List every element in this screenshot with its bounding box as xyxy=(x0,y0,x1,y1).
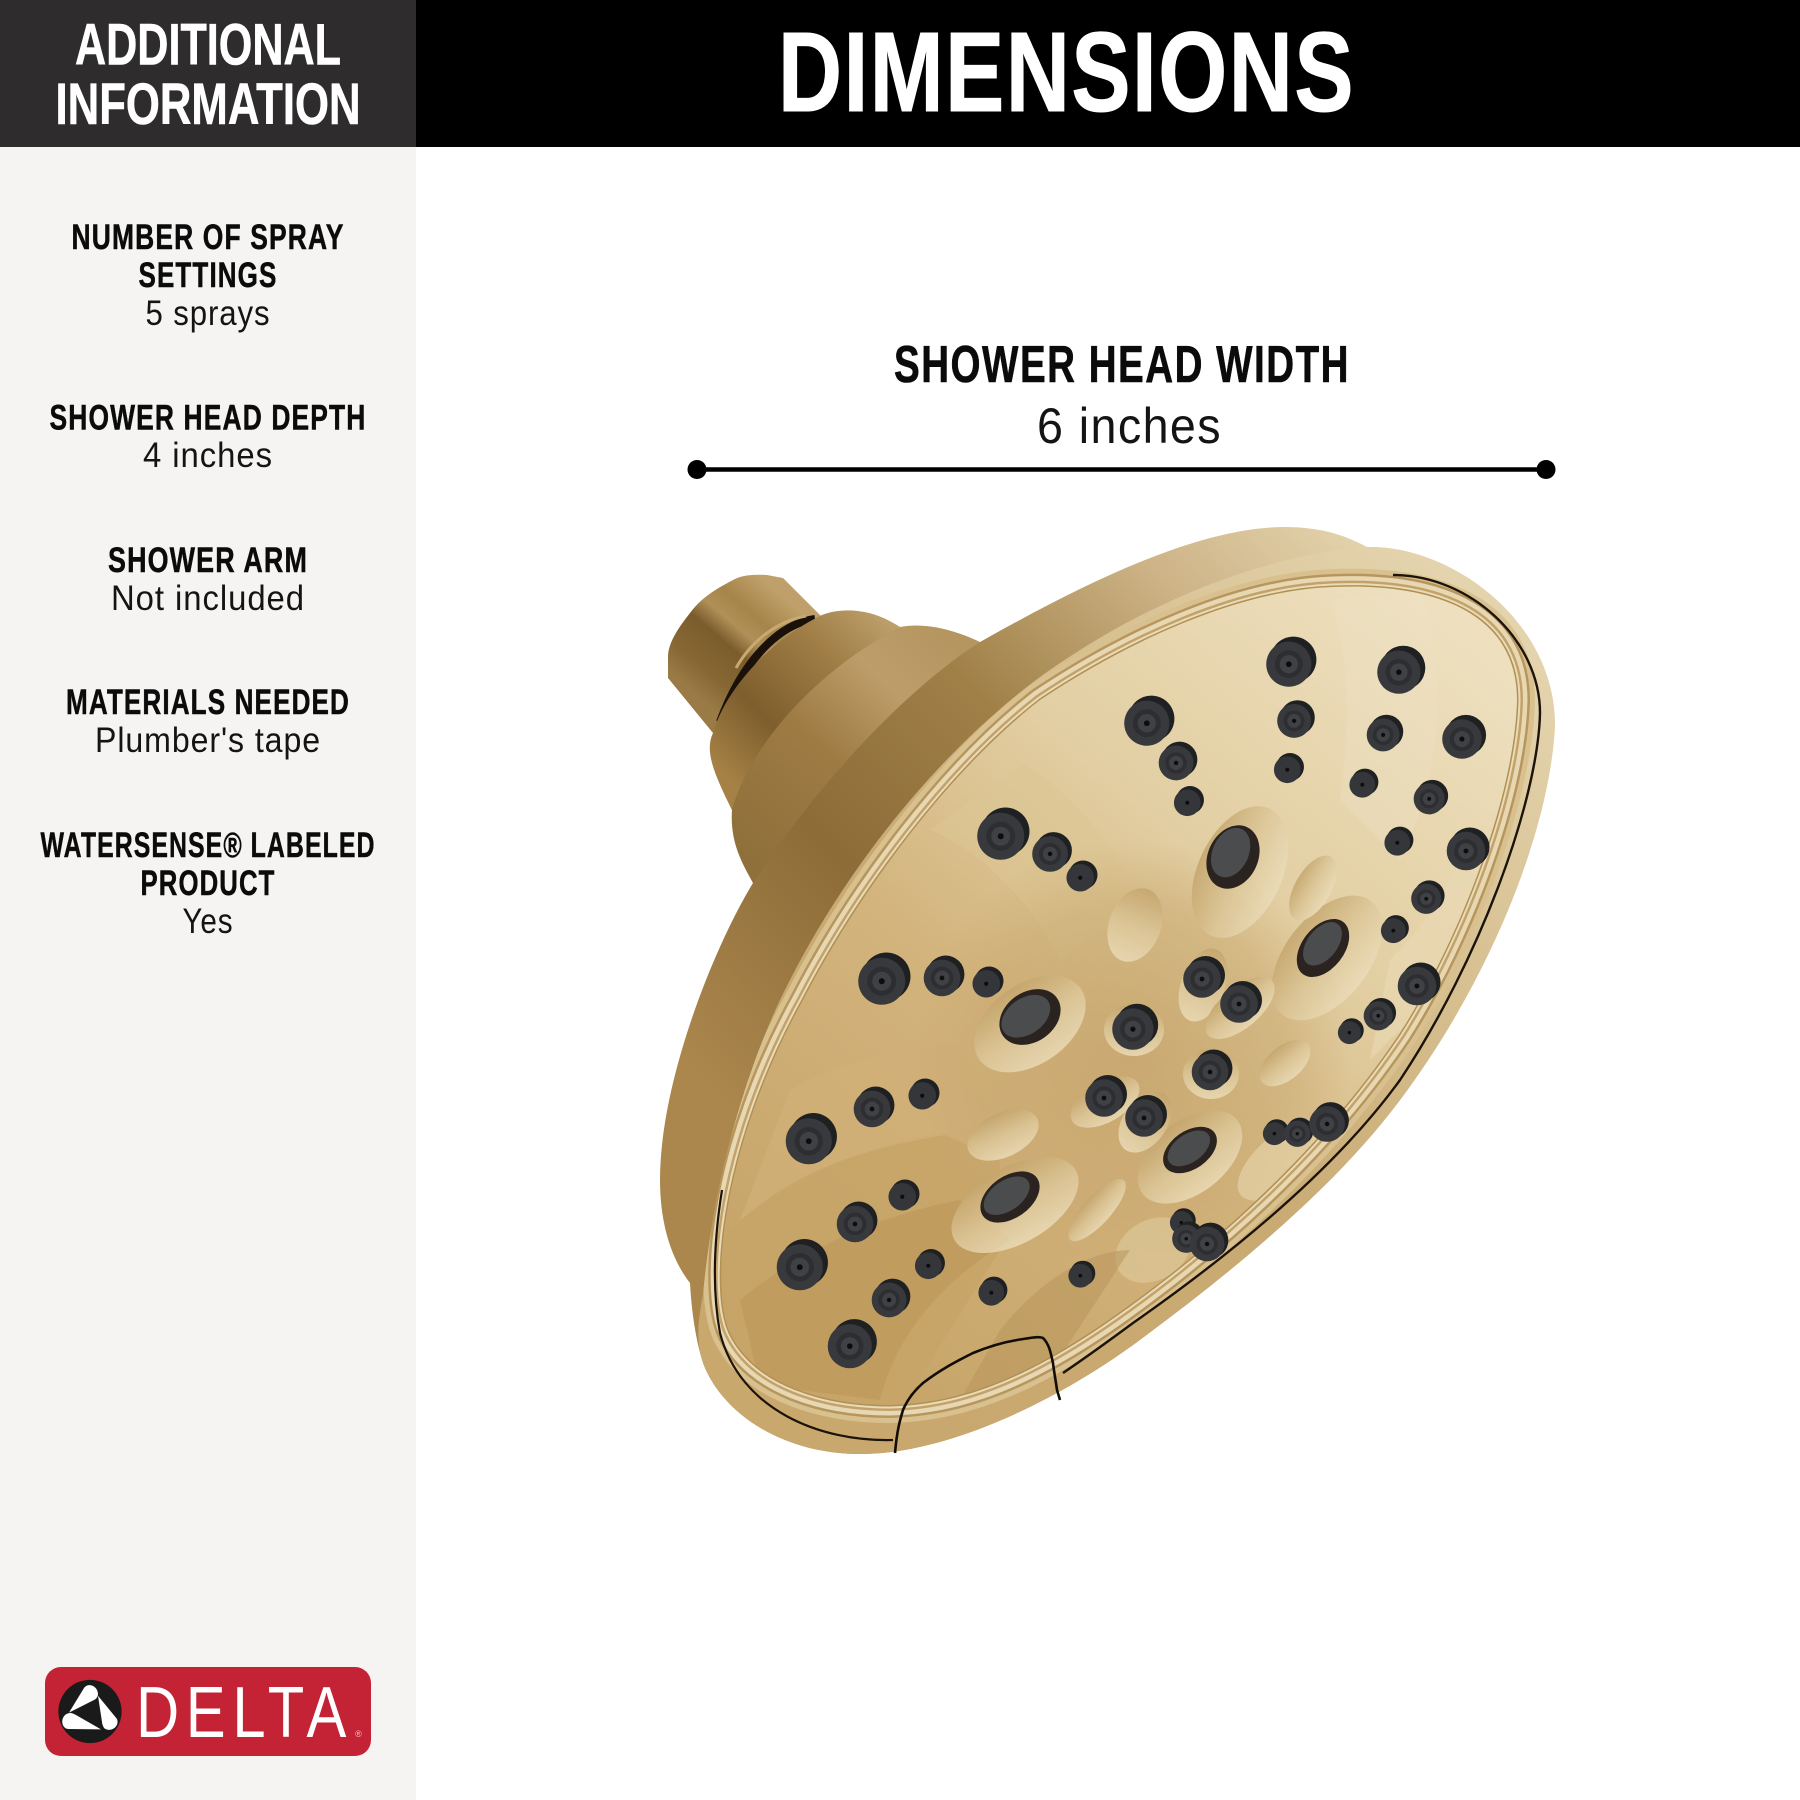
spec: watersense labeled product: Yes xyxy=(182,902,234,941)
spec: watersense labeled product xyxy=(40,825,376,941)
logo: delta: ® xyxy=(355,1729,362,1739)
spec: shower arm: SHOWER ARM xyxy=(108,540,308,580)
spec: shower arm: Not included xyxy=(111,579,305,618)
spec: materials needed xyxy=(66,682,350,760)
head shell xyxy=(660,527,1555,1454)
spray plate xyxy=(721,587,1517,1405)
header: additional information: ADDITIONAL xyxy=(75,12,341,77)
spec: number of spray settings: 5 sprays xyxy=(146,294,270,333)
spec: shower head depth xyxy=(50,398,366,475)
rim lip xyxy=(698,547,1555,1454)
header: additional information: INFORMATION xyxy=(56,72,360,137)
illustration: shower head xyxy=(660,527,1555,1454)
seam line upper right xyxy=(1063,575,1540,1373)
panel: additional information sidebar xyxy=(0,147,416,1800)
lower collar xyxy=(732,625,1000,900)
spec: shower head depth: SHOWER HEAD DEPTH xyxy=(50,398,366,438)
plate dimples xyxy=(935,791,1404,1273)
dimension label: shower head width: SHOWER HEAD WIDTH xyxy=(894,336,1350,394)
connector nut xyxy=(668,575,830,733)
spec: shower arm xyxy=(108,540,308,618)
header: additional information xyxy=(0,0,416,147)
dimension label: shower head width: 6 inches xyxy=(1037,398,1222,454)
rim grooves xyxy=(721,587,1517,1405)
spec: number of spray settings: NUMBER OF SPRAY xyxy=(72,217,344,257)
upper collar xyxy=(710,610,950,860)
spec: materials needed: Plumber's tape xyxy=(95,721,321,760)
spec: watersense labeled product: WATERSENSE® LABELED xyxy=(40,825,376,865)
dimension label: shower head width xyxy=(894,336,1350,454)
spec: shower head depth: 4 inches xyxy=(143,436,273,475)
spec: number of spray settings xyxy=(72,217,344,333)
spec: number of spray settings: SETTINGS xyxy=(138,255,278,295)
seam line lower left xyxy=(715,1190,893,1440)
spec: watersense labeled product: PRODUCT xyxy=(140,863,276,903)
dimension line: width arrow xyxy=(688,460,1556,479)
spec: materials needed: MATERIALS NEEDED xyxy=(66,682,350,722)
header: dimensions title: DIMENSIONS xyxy=(778,9,1355,135)
spray nozzles xyxy=(777,637,1490,1368)
logo: delta xyxy=(45,1667,371,1756)
large spray openings xyxy=(971,817,1360,1233)
spray selector tab outline xyxy=(895,1337,1060,1453)
header: dimensions title xyxy=(416,0,1800,147)
plate petals shading xyxy=(725,590,1480,1410)
logo: delta: DELTA xyxy=(136,1673,353,1753)
